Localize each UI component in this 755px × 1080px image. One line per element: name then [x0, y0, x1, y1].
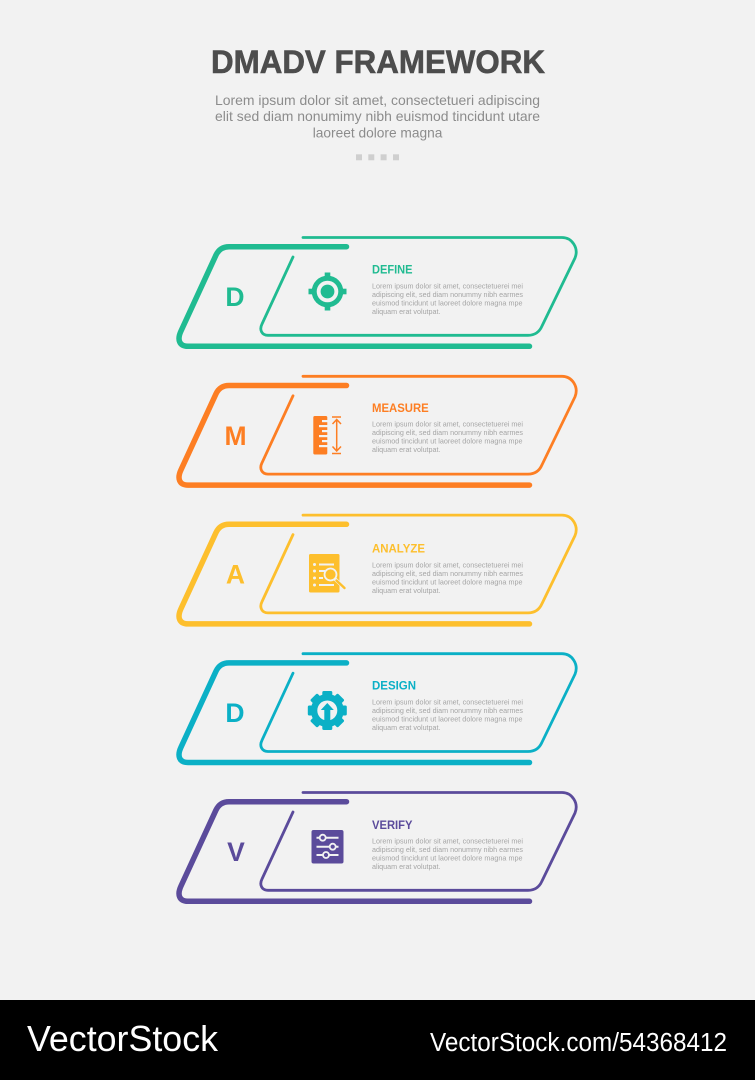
- define inner frame: [261, 238, 576, 335]
- verify letter: V: [227, 837, 245, 867]
- analyze heading: ANALYZE: [372, 542, 425, 556]
- verify inner frame: [261, 792, 576, 890]
- design body text: Lorem ipsum dolor sit amet, consectetuerei mei: [372, 698, 523, 706]
- analyze body text: adipiscing elit, sed diam nonummy nibh earmes: [372, 569, 523, 578]
- subtitle: elit sed diam nonumimy nibh euismod tincidunt utare: [215, 108, 540, 124]
- measure body text: euismod tincidunt ut laoreet dolore magna mpe: [372, 436, 522, 446]
- analyze body text: [372, 560, 523, 595]
- design heading: DESIGN: [372, 678, 416, 692]
- define body text: aliquam erat volutpat.: [372, 307, 440, 316]
- icon: sliders: [312, 830, 344, 864]
- icon: report with magnifier: [309, 554, 345, 592]
- define outer frame: [179, 247, 529, 346]
- verify body text: Lorem ipsum dolor sit amet, consectetuerei mei: [372, 836, 523, 846]
- verify heading: VERIFY: [372, 818, 412, 832]
- watermark band: [0, 1000, 755, 1080]
- measure body text: [372, 420, 523, 454]
- analyze inner frame: [261, 515, 576, 613]
- analyze body text: aliquam erat volutpat.: [372, 586, 440, 595]
- analyze letter: A: [226, 560, 245, 590]
- subtitle: [215, 92, 540, 140]
- design outer frame: [179, 663, 529, 762]
- define heading: DEFINE: [372, 262, 412, 276]
- pagination dots: [356, 154, 399, 160]
- define body text: adipiscing elit, sed diam nonummy nibh earmes: [372, 290, 523, 299]
- analyze body text: Lorem ipsum dolor sit amet, consectetuerei mei: [372, 560, 523, 570]
- panel: analyze: [179, 515, 576, 624]
- verify body text: aliquam erat volutpat.: [372, 862, 440, 871]
- design inner frame: [261, 654, 576, 752]
- measure heading: MEASURE: [372, 401, 429, 415]
- icon: target: [308, 272, 346, 310]
- define body text: [372, 282, 523, 316]
- define letter: D: [225, 282, 245, 312]
- icon: ruler with arrow: [313, 416, 341, 454]
- measure letter: M: [224, 421, 247, 451]
- measure inner frame: [261, 376, 576, 474]
- watermark logo: VectorStock: [27, 1018, 219, 1059]
- panel: design: [179, 654, 576, 762]
- design body text: [372, 698, 523, 732]
- design body text: adipiscing elit, sed diam nonummy nibh earmes: [372, 706, 523, 715]
- analyze outer frame: [179, 524, 529, 624]
- measure body text: adipiscing elit, sed diam nonummy nibh earmes: [372, 428, 523, 437]
- verify body text: euismod tincidunt ut laoreet dolore magna mpe: [372, 854, 522, 862]
- analyze body text: euismod tincidunt ut laoreet dolore magna mpe: [372, 578, 522, 586]
- verify outer frame: [179, 802, 529, 901]
- subtitle: Lorem ipsum dolor sit amet, consectetueri adipiscing: [215, 92, 540, 108]
- panel: measure: [179, 376, 576, 485]
- verify body text: adipiscing elit, sed diam nonummy nibh earmes: [372, 845, 523, 854]
- verify body text: [372, 836, 523, 871]
- measure body text: aliquam erat volutpat.: [372, 445, 440, 454]
- panel: define: [179, 238, 576, 346]
- design body text: aliquam erat volutpat.: [372, 723, 440, 732]
- watermark url: VectorStock.com/54368412: [430, 1029, 727, 1057]
- design body text: euismod tincidunt ut laoreet dolore magna mpe: [372, 714, 522, 724]
- design letter: D: [225, 698, 245, 728]
- icon: gear with up arrow: [308, 691, 347, 730]
- measure body text: Lorem ipsum dolor sit amet, consectetuerei mei: [372, 420, 523, 428]
- define body text: Lorem ipsum dolor sit amet, consectetuerei mei: [372, 282, 523, 290]
- panel: verify: [179, 792, 576, 901]
- title: DMADV FRAMEWORK: [211, 44, 545, 80]
- subtitle: laoreet dolore magna: [313, 124, 443, 140]
- define body text: euismod tincidunt ut laoreet dolore magna mpe: [372, 298, 522, 308]
- measure outer frame: [179, 386, 529, 485]
